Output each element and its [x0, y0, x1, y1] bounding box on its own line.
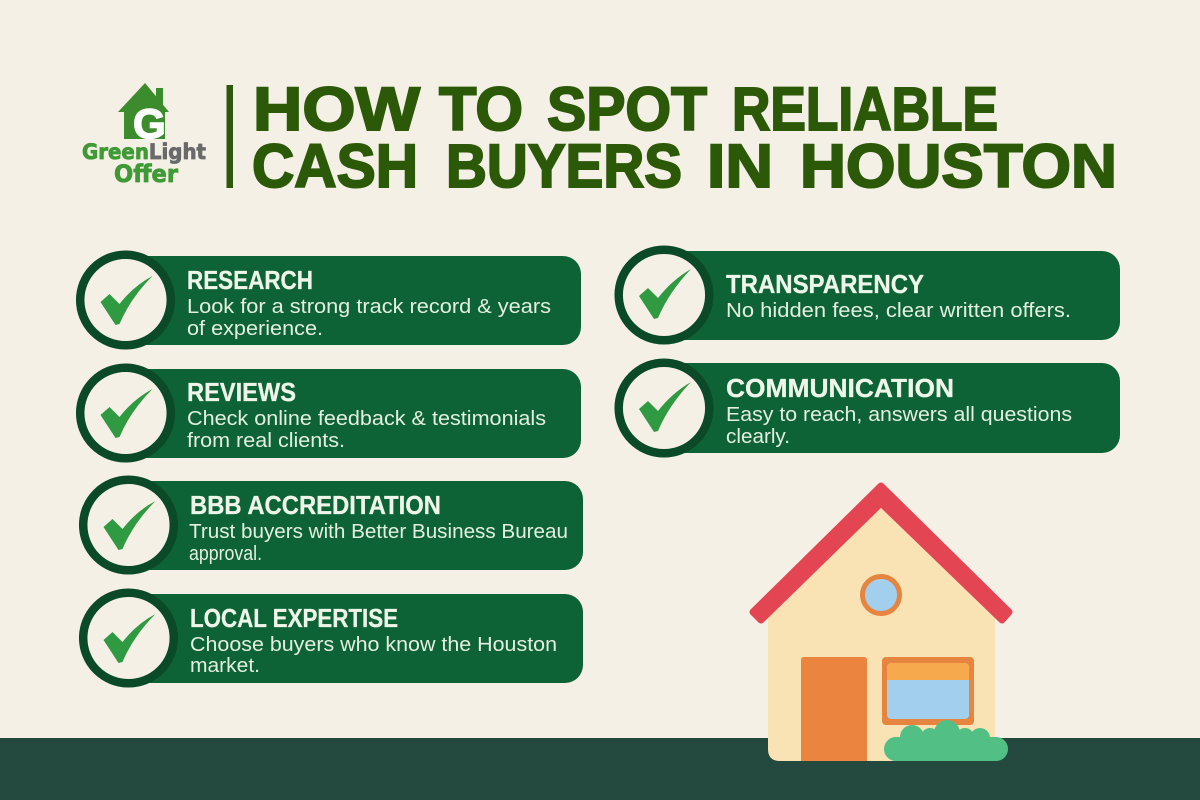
logo wordmark: Offer	[114, 160, 178, 188]
icon: check ring	[83, 593, 174, 683]
heading: bbb accreditation: BBB ACCREDITATION	[190, 490, 441, 520]
title: BUYERS	[446, 132, 682, 200]
heading: reviews: REVIEWS	[187, 377, 296, 407]
title: SPOT	[547, 75, 707, 143]
heading: transparency: TRANSPARENCY	[726, 269, 924, 299]
icon: check ring	[619, 363, 709, 453]
ground band	[0, 738, 1200, 800]
title: TO	[439, 75, 523, 143]
text: bbb accreditation: Trust buyers with Better Business Bureau	[189, 521, 568, 543]
heading: research: RESEARCH	[187, 265, 313, 295]
house roof	[753, 486, 1009, 620]
door	[801, 657, 867, 761]
item: research	[80, 255, 581, 345]
icon: check ring	[83, 480, 174, 570]
icon: check ring	[619, 250, 709, 340]
text: local expertise: market.	[190, 655, 260, 677]
item: communication	[619, 363, 1120, 453]
icon: check ring	[80, 255, 171, 345]
text: research: Look for a strong track record & years	[187, 296, 551, 318]
heading: local expertise: LOCAL EXPERTISE	[190, 603, 398, 633]
item: bbb accreditation	[83, 480, 583, 570]
title: RELIABLE	[732, 75, 998, 143]
text: reviews: from real clients.	[187, 430, 345, 452]
item: local expertise	[83, 593, 583, 683]
text: bbb accreditation: approval.	[189, 543, 262, 565]
illustration: house	[753, 486, 1009, 761]
item: reviews	[80, 368, 581, 458]
title: IN	[707, 132, 773, 200]
title: HOW	[253, 75, 420, 143]
heading: communication: COMMUNICATION	[726, 373, 954, 403]
round attic window	[862, 576, 900, 614]
item: transparency	[619, 250, 1120, 340]
window	[882, 657, 974, 725]
text: local expertise: Choose buyers who know the Houston	[190, 634, 557, 656]
icon: logo house: G	[133, 100, 166, 147]
icon: check ring	[80, 368, 171, 458]
title: HOUSTON	[800, 132, 1117, 200]
text: communication: Easy to reach, answers all questions	[726, 404, 1072, 426]
bush	[884, 720, 1008, 761]
text: research: of experience.	[187, 318, 323, 340]
logo wordmark: GreenLight	[82, 140, 206, 164]
text: transparency: No hidden fees, clear written offers.	[726, 300, 1071, 322]
title	[252, 75, 1117, 200]
title divider	[226, 85, 233, 188]
text: communication: clearly.	[726, 426, 790, 448]
title: CASH	[252, 132, 418, 200]
house wall	[768, 500, 995, 761]
logo: GreenLight Offer	[82, 83, 206, 188]
text: reviews: Check online feedback & testimonials	[187, 408, 546, 430]
logo wordmark	[82, 140, 206, 188]
